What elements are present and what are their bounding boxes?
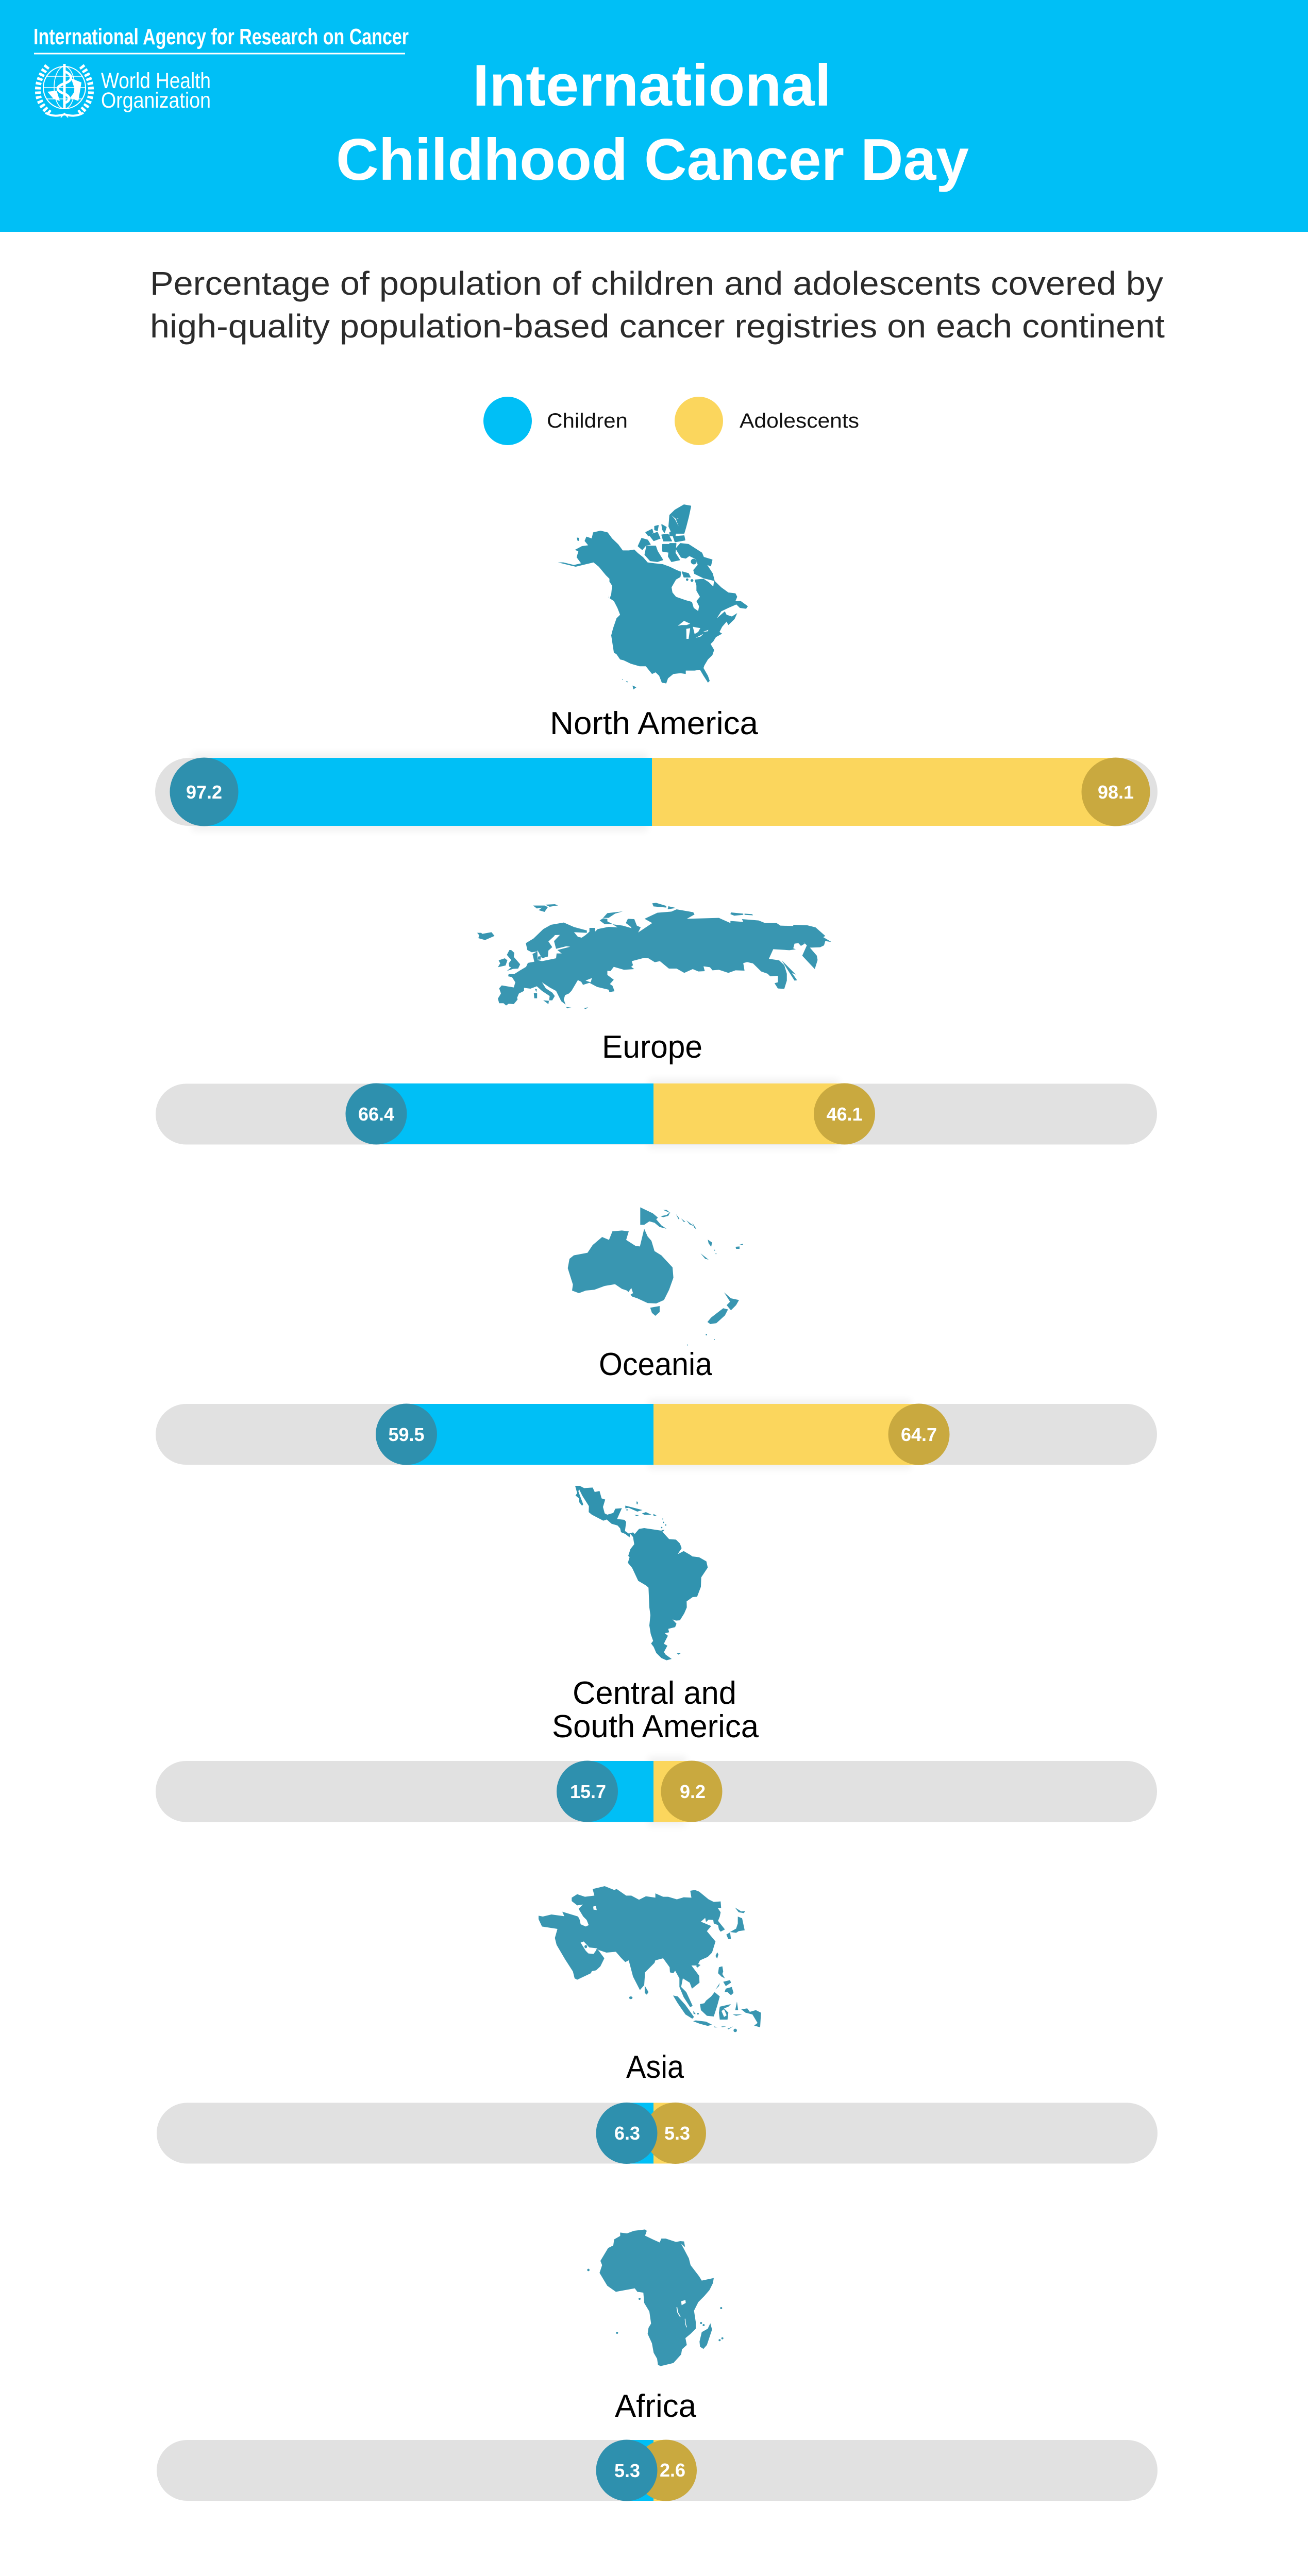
label: Central and xyxy=(573,1675,736,1711)
children value: 97.2 xyxy=(186,782,222,803)
children value xyxy=(557,1761,618,1822)
children value xyxy=(170,757,238,826)
subtitle xyxy=(150,265,1165,345)
bar chart xyxy=(155,753,1158,831)
logo rule xyxy=(34,53,405,55)
header band xyxy=(0,0,1308,232)
children value xyxy=(345,1083,407,1145)
label: Africa xyxy=(615,2388,697,2424)
adolescents value xyxy=(814,1083,875,1145)
children value: 5.3 xyxy=(614,2460,640,2481)
subtitle: Percentage of population of children and adolescents covered by xyxy=(150,265,1163,302)
adolescents value: 5.3 xyxy=(664,2123,690,2144)
header band: Organization xyxy=(101,88,211,113)
panel: Oceania xyxy=(156,1207,1157,1469)
label xyxy=(552,1675,759,1744)
bar chart xyxy=(157,2440,1158,2501)
panel: Central and South America xyxy=(156,1486,1157,1826)
adolescents value: 64.7 xyxy=(901,1424,937,1445)
panel: Africa xyxy=(157,2229,1158,2501)
children value: 59.5 xyxy=(388,1424,425,1445)
label: North America xyxy=(550,706,759,741)
adolescents value xyxy=(661,1761,723,1822)
adolescents value: 46.1 xyxy=(826,1104,863,1125)
adolescents value: 9.2 xyxy=(680,1781,706,1802)
bar chart xyxy=(156,1079,1157,1149)
legend: Children xyxy=(547,410,628,432)
adolescents value xyxy=(645,2103,706,2164)
children value xyxy=(596,2440,658,2501)
bar chart xyxy=(156,1756,1157,1826)
map: Central and South America xyxy=(575,1486,708,1660)
IARC name: International Agency for Research on Cancer xyxy=(33,24,409,49)
bar chart xyxy=(157,2103,1158,2164)
label: South America xyxy=(552,1709,759,1744)
title: Childhood Cancer Day xyxy=(336,127,969,193)
map: Europe xyxy=(477,903,831,1009)
bar chart xyxy=(156,1399,1157,1469)
subtitle: high-quality population-based cancer registries on each continent xyxy=(150,308,1165,345)
adolescents value xyxy=(1081,757,1150,826)
children value: 6.3 xyxy=(614,2123,640,2144)
map: Oceania xyxy=(568,1207,743,1346)
legend: Adolescents xyxy=(740,410,859,432)
label: Asia xyxy=(626,2049,684,2085)
icon: WHO emblem xyxy=(38,64,91,117)
map: Asia xyxy=(539,1886,761,2032)
map: North America xyxy=(558,505,748,689)
title xyxy=(336,53,969,193)
children value: 66.4 xyxy=(358,1104,394,1125)
children value xyxy=(376,1403,437,1465)
label: Oceania xyxy=(599,1347,712,1382)
label: Europe xyxy=(602,1029,702,1065)
children value: 15.7 xyxy=(570,1781,606,1802)
panel: North America xyxy=(155,505,1158,831)
bar chart: 2.6 xyxy=(660,2460,685,2481)
title: International xyxy=(473,53,831,118)
arctic islands xyxy=(638,505,714,581)
adolescents value: 98.1 xyxy=(1098,782,1134,803)
panel: Asia xyxy=(157,1886,1158,2164)
legend xyxy=(483,397,859,445)
adolescents value xyxy=(888,1403,949,1465)
map: Africa xyxy=(587,2229,724,2366)
adolescents value xyxy=(635,2440,697,2501)
WHO name: World Health xyxy=(101,69,211,93)
panel: Europe xyxy=(156,903,1157,1149)
children value xyxy=(596,2103,658,2164)
